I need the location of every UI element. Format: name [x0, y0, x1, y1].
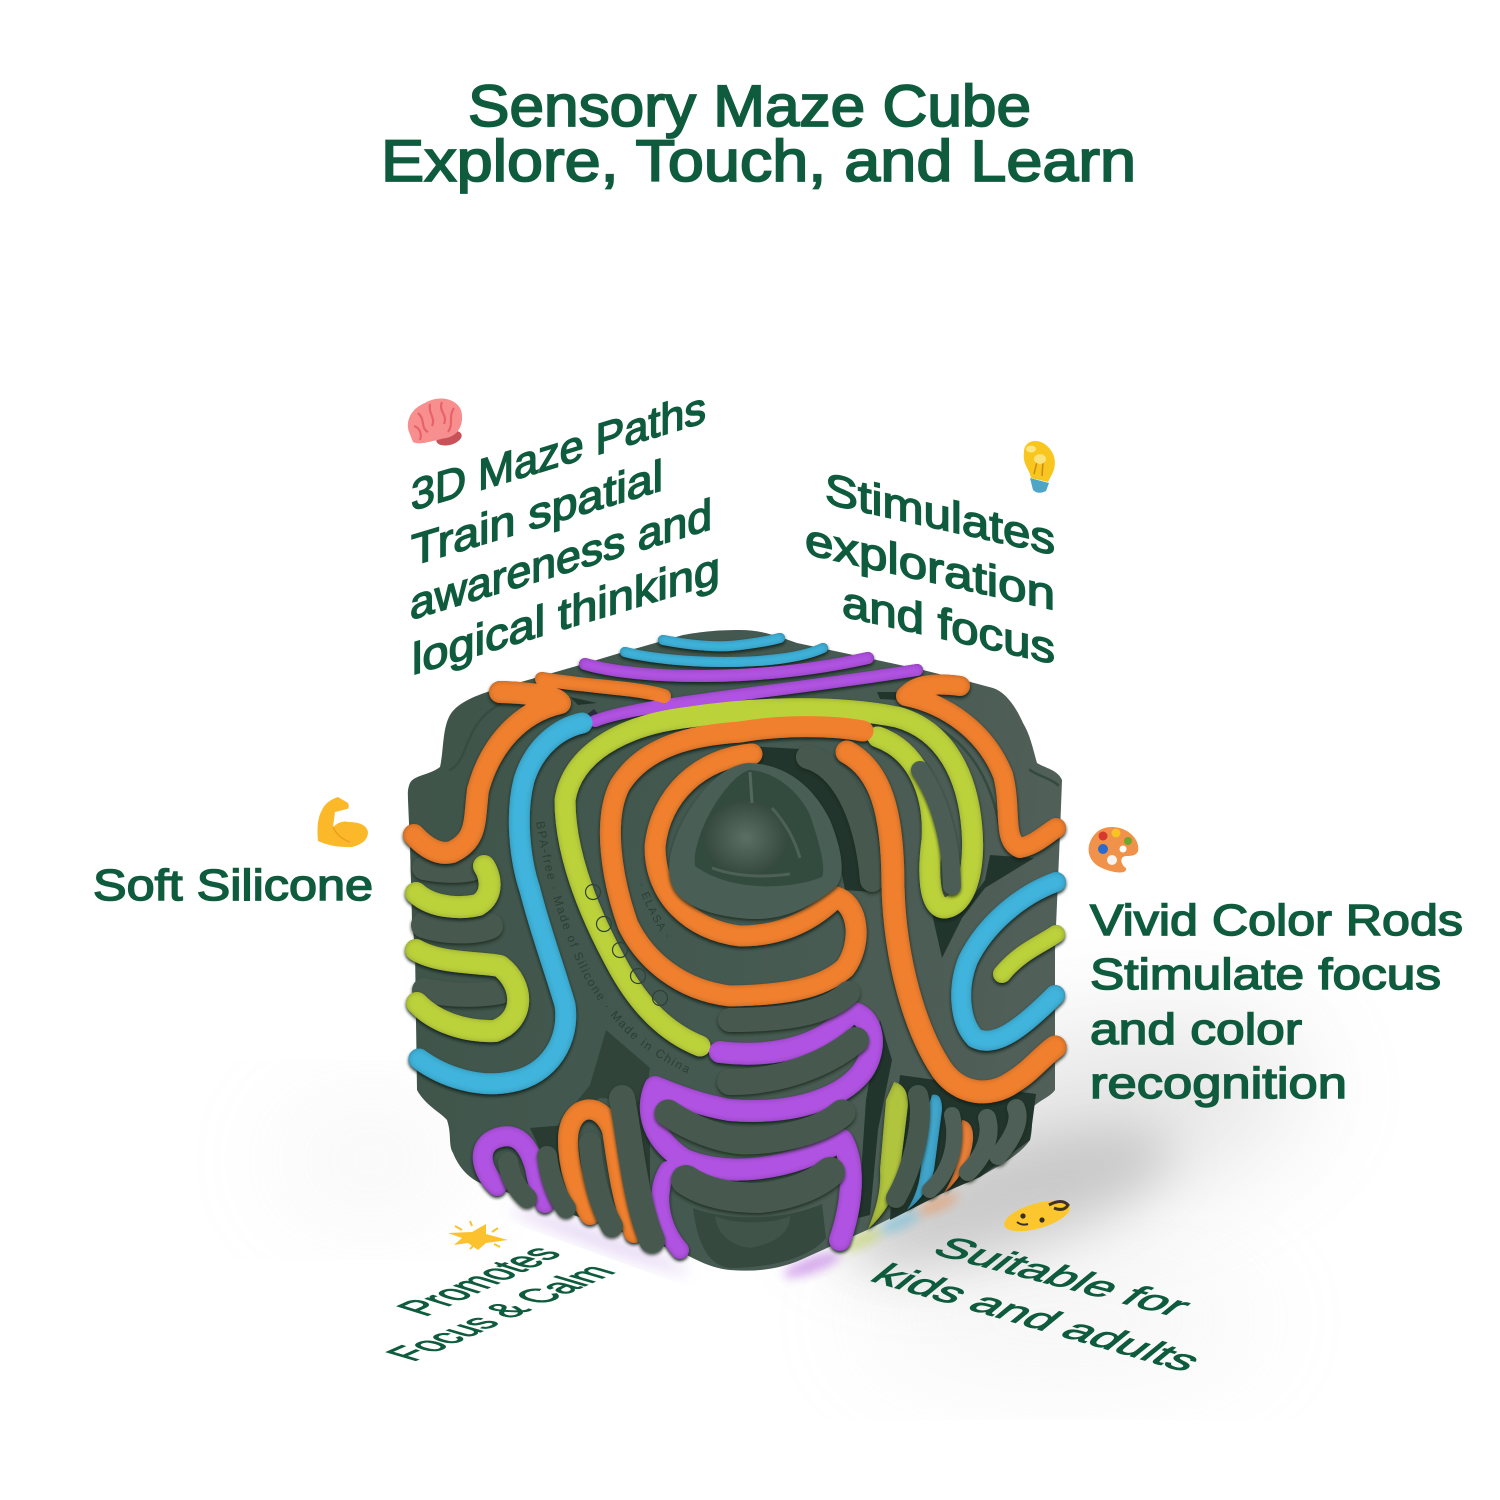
title	[381, 74, 1136, 194]
callout: 3D maze paths: 3D Maze Paths	[411, 382, 706, 521]
rod: purple main	[651, 1012, 872, 1240]
icon: brain	[408, 399, 463, 448]
callout: stimulates exploration: and focus	[842, 578, 1055, 674]
label: soft silicone: Soft Silicone	[93, 861, 373, 910]
rod: blue top	[663, 638, 780, 646]
rod: purple low	[660, 1170, 680, 1250]
rod: lime left	[416, 866, 490, 907]
rod: right lower rods	[868, 1082, 908, 1229]
left side ridges	[424, 866, 500, 995]
callout: stimulates exploration: Stimulates	[825, 465, 1055, 565]
rod: orange ring	[610, 727, 863, 996]
floor shadow	[280, 982, 1324, 1370]
rod: orange left	[414, 692, 560, 853]
callout: 3D maze paths: logical thinking	[412, 542, 720, 685]
callout: promotes focus and calm: Focus & Calm	[374, 1261, 626, 1365]
center socket dome	[669, 763, 842, 919]
embossed text on cube: BPA-free · Made of Silicone · Made in China	[536, 822, 689, 1074]
icon: baby face	[1001, 1195, 1073, 1237]
callout: vivid color rods	[1090, 896, 1463, 1108]
callout: 3D maze paths	[410, 382, 720, 685]
callout: promotes focus and calm: Promotes	[385, 1242, 573, 1320]
icon: sparkle star	[448, 1221, 508, 1250]
callout: vivid color rods: Stimulate focus	[1090, 950, 1441, 999]
rod: orange right vertical	[847, 752, 1055, 1092]
icon: flexed biceps	[318, 797, 368, 847]
rod: blue main	[419, 723, 582, 1084]
maze cube	[400, 630, 1069, 1271]
bottom corner socket	[693, 1204, 826, 1268]
cube body	[408, 630, 1062, 1271]
rod: orange arch	[568, 1109, 634, 1233]
callout: suitable for kids and adults: kids and adults	[861, 1258, 1211, 1378]
callout: stimulates exploration	[805, 465, 1055, 674]
title: Explore, Touch, and Learn	[381, 129, 1136, 194]
embossed text on cube: · ELASA ·	[640, 884, 668, 936]
icon: artist palette	[1089, 827, 1138, 872]
rod: blue right	[961, 882, 1056, 1041]
rod: orange top right	[906, 684, 1056, 848]
rod: purple top	[585, 658, 868, 676]
rod: purple left	[483, 1136, 545, 1203]
rods	[414, 638, 1056, 1250]
callout: stimulates exploration: exploration	[805, 515, 1055, 620]
rod: orange top	[542, 679, 664, 696]
rod: lime main	[565, 709, 973, 1046]
callout: vivid color rods: recognition	[1090, 1059, 1347, 1108]
cube top shading	[450, 704, 1058, 830]
callout: vivid color rods: Vivid Color Rods	[1090, 896, 1463, 945]
icon: light bulb	[1024, 441, 1055, 493]
callout: suitable for kids and adults: Suitable for	[923, 1232, 1201, 1322]
cavities	[530, 692, 1036, 1240]
callout: vivid color rods: and color	[1090, 1005, 1302, 1054]
callout: 3D maze paths: awareness and	[410, 489, 712, 630]
rod: lime right	[1002, 934, 1056, 974]
callout: 3D maze paths: Train spatial	[411, 450, 663, 576]
body ridges	[508, 757, 1018, 1240]
title: Sensory Maze Cube	[468, 74, 1031, 139]
